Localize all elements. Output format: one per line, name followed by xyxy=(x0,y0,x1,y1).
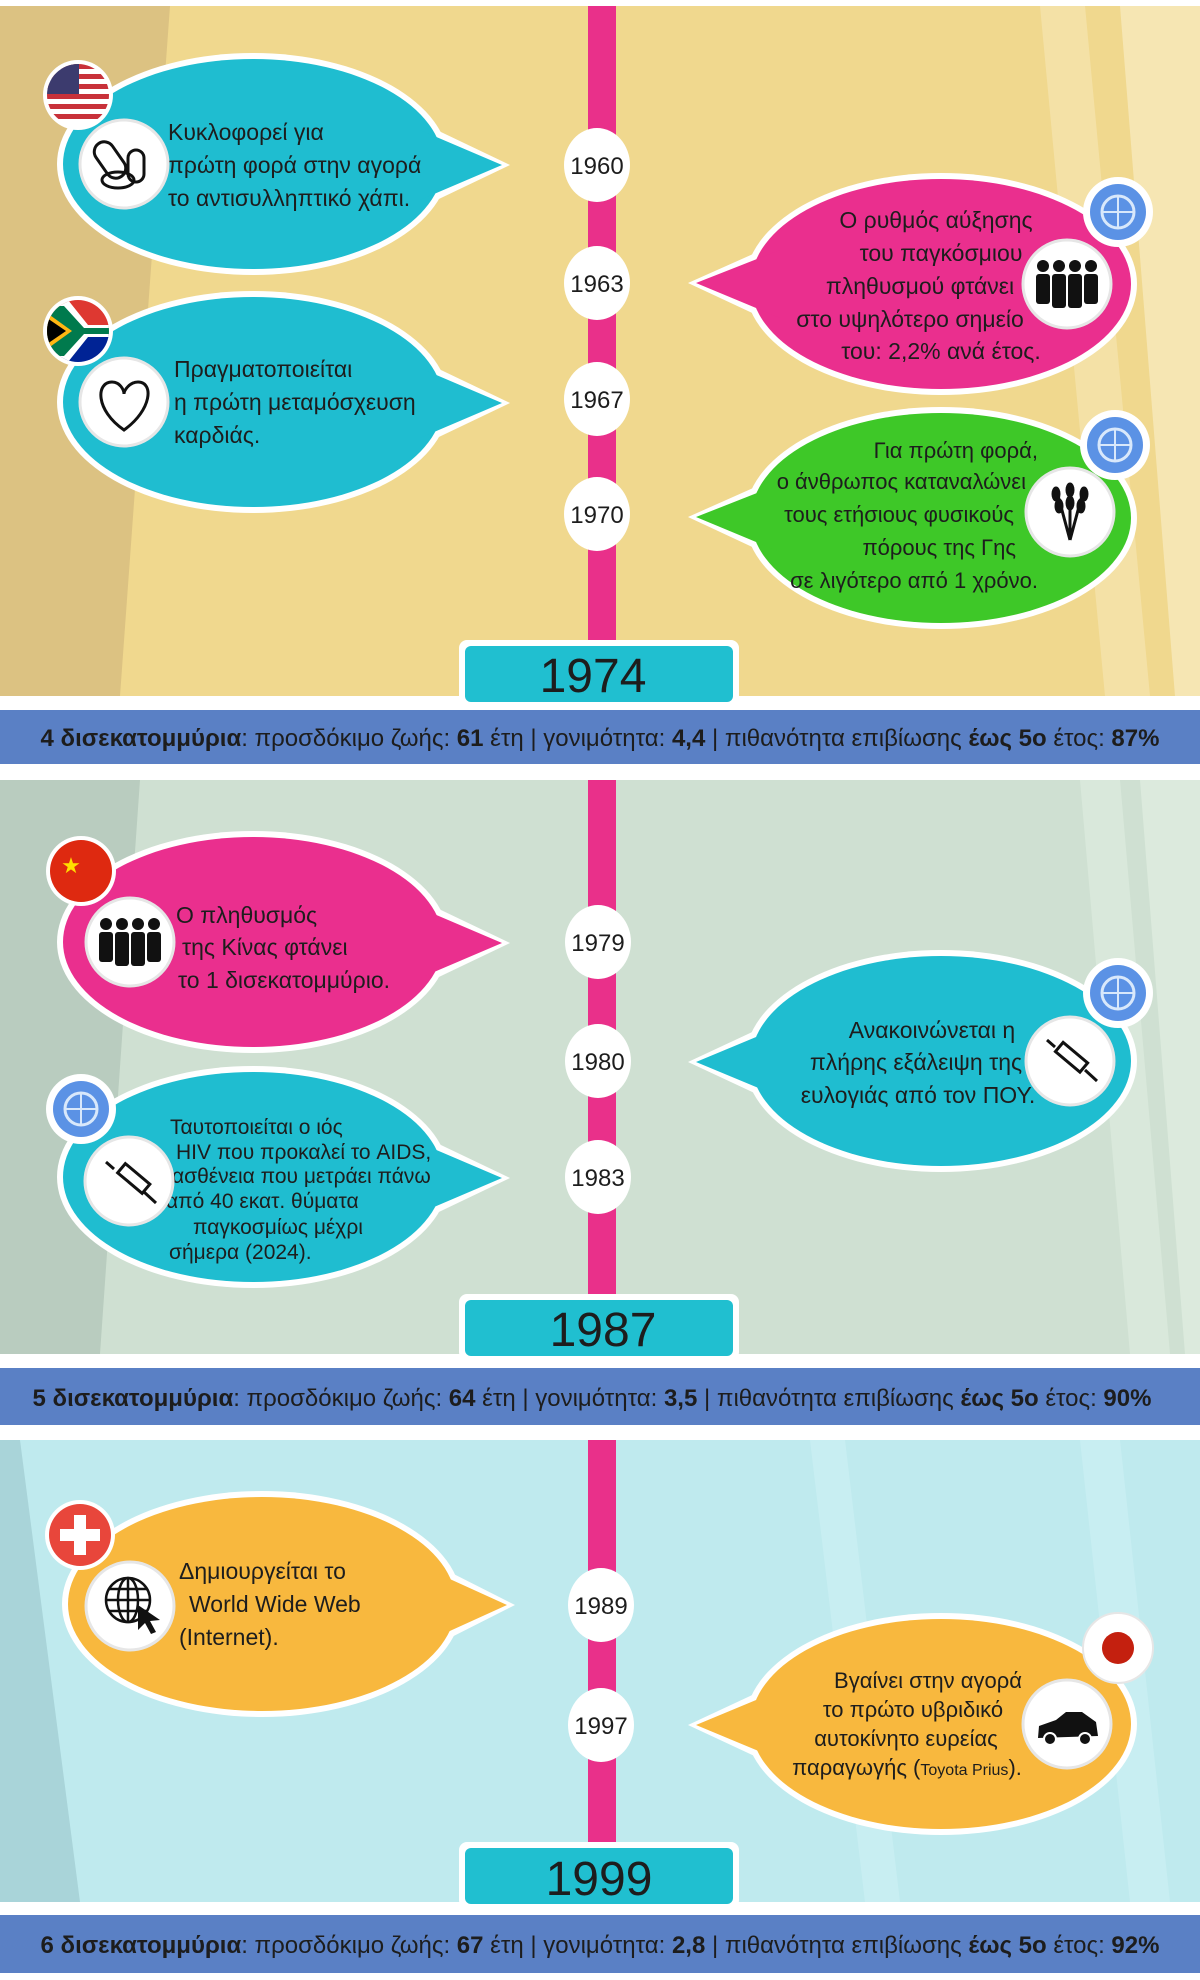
bubble: HIV 1983: παγκοσμίως μέχρι xyxy=(193,1216,363,1239)
icon: syringe smallpox xyxy=(1026,1017,1114,1105)
bubble: China 1979: της Κίνας φτάνει xyxy=(182,934,348,960)
stats band 1974 xyxy=(0,710,1200,764)
bubble: population growth 1963: πληθυσμού φτάνει xyxy=(826,273,1014,299)
bubble: China 1979: Ο πληθυσμός xyxy=(176,902,317,928)
flag: UN 3 xyxy=(46,1074,116,1144)
icon: heart xyxy=(80,358,168,446)
icon: car xyxy=(1023,1680,1111,1768)
bubble: Prius 1997: παραγωγής (Toyota Prius). xyxy=(792,1755,1022,1780)
stats band 1974: 4 δισεκατομμύρια: προσδόκιμο ζωής: 61 έτη | γονιμότητα: 4,4 | πιθανότητα επιβίωσης έως 5ο έτος: 87% xyxy=(41,725,1159,752)
flag: USA xyxy=(43,60,113,130)
year box 1974 xyxy=(459,640,739,706)
bubble: smallpox 1980 xyxy=(688,950,1137,1172)
bubble: China 1979 xyxy=(57,831,510,1053)
stats band 1999: 6 δισεκατομμύρια: προσδόκιμο ζωής: 67 έτη | γονιμότητα: 2,8 | πιθανότητα επιβίωσης έως 5ο έτος: 92% xyxy=(41,1932,1159,1959)
bubble: resources 1970: τους ετήσιους φυσικούς xyxy=(784,502,1014,527)
bubble: WWW 1989: Δημιουργείται το xyxy=(179,1558,346,1584)
year markers section 1: 1963 xyxy=(570,271,624,298)
bubble: Prius 1997: αυτοκίνητο ευρείας xyxy=(814,1726,998,1751)
bubble: pill 1960: το αντισυλληπτικό χάπι. xyxy=(168,185,410,211)
stats band 1999 xyxy=(0,1915,1200,1973)
stats band 1987 xyxy=(0,1368,1200,1425)
bubble: WWW 1989 xyxy=(62,1491,515,1717)
bubble: resources 1970: σε λιγότερο από 1 χρόνο. xyxy=(790,568,1038,593)
year box 1999 xyxy=(459,1842,739,1908)
bubble: population growth 1963: του: 2,2% ανά έτος. xyxy=(841,338,1041,364)
flag: Japan xyxy=(1083,1613,1153,1683)
bubble: WWW 1989: World Wide Web xyxy=(189,1591,361,1617)
icon: globe cursor xyxy=(86,1562,174,1650)
flag: Switzerland xyxy=(45,1500,115,1570)
year markers section 1: 1970 xyxy=(570,502,624,529)
bubble: smallpox 1980: πλήρης εξάλειψη της xyxy=(810,1049,1022,1075)
bubble: pill 1960: πρώτη φορά στην αγορά xyxy=(168,152,421,178)
bubble: resources 1970 xyxy=(688,407,1137,629)
bubble: population growth 1963 xyxy=(688,173,1137,395)
flag: China: ★ xyxy=(61,853,81,878)
bubble: HIV 1983: HIV που προκαλεί το AIDS, xyxy=(176,1141,431,1164)
bubble: heart 1967 xyxy=(57,291,510,513)
year markers section 1: 1960 xyxy=(570,153,624,180)
bubble: pill 1960 xyxy=(57,53,510,275)
bubble: Prius 1997 xyxy=(688,1613,1137,1835)
timeline bar 2 xyxy=(588,780,616,1300)
year markers section 2: 1980 xyxy=(571,1049,625,1076)
flag: South Africa xyxy=(43,296,113,366)
flag: UN 2 xyxy=(1080,410,1150,480)
icon: people China xyxy=(86,898,174,986)
stats band 1987: 5 δισεκατομμύρια: προσδόκιμο ζωής: 64 έτη | γονιμότητα: 3,5 | πιθανότητα επιβίωσης έως 5ο έτος: 90% xyxy=(33,1385,1151,1412)
icon: pills xyxy=(80,120,168,208)
icon: syringe HIV xyxy=(85,1137,173,1225)
bubble: China 1979: το 1 δισεκατομμύριο. xyxy=(178,967,390,993)
bubble: population growth 1963: Ο ρυθμός αύξησης xyxy=(839,207,1033,233)
bubble: heart 1967: καρδιάς. xyxy=(174,422,260,448)
bubble: heart 1967: Πραγματοποιείται xyxy=(174,356,352,382)
year markers section 2: 1979 xyxy=(571,930,625,957)
bubble: WWW 1989: (Internet). xyxy=(179,1624,279,1650)
year box 1987 xyxy=(459,1294,739,1360)
bubble: resources 1970: ο άνθρωπος καταναλώνει xyxy=(777,469,1026,494)
bubble: HIV 1983: Ταυτοποιείται ο ιός xyxy=(170,1116,343,1139)
bubble: HIV 1983: από 40 εκατ. θύματα xyxy=(166,1190,359,1213)
bubble: HIV 1983: ασθένεια που μετράει πάνω xyxy=(172,1165,431,1188)
icon: wheat xyxy=(1026,468,1114,556)
year markers section 2: 1983 xyxy=(571,1165,625,1192)
flag: UN 4 xyxy=(1083,958,1153,1028)
bubble: smallpox 1980: ευλογιάς από τον ΠΟΥ. xyxy=(801,1082,1035,1108)
year markers section 1 xyxy=(564,128,630,551)
bubble: HIV 1983 xyxy=(57,1066,510,1288)
timeline bar 3 xyxy=(588,1440,616,1850)
year markers section 3: 1989 xyxy=(574,1593,628,1620)
panel: section 1960-1974 background xyxy=(0,6,1200,696)
bubble: resources 1970: πόρους της Γης xyxy=(862,535,1016,560)
bubble: smallpox 1980: Ανακοινώνεται η xyxy=(849,1017,1015,1043)
year box 1999: 1999 xyxy=(546,1853,652,1906)
bubble: resources 1970: Για πρώτη φορά, xyxy=(874,438,1038,463)
year box 1974: 1974 xyxy=(540,650,646,703)
icon: people xyxy=(1023,240,1111,328)
year box 1987: 1987 xyxy=(550,1304,656,1357)
flag: UN 1 xyxy=(1083,177,1153,247)
bubble: heart 1967: η πρώτη μεταμόσχευση xyxy=(174,389,416,415)
year markers section 2 xyxy=(565,905,631,1214)
bubble: Prius 1997: το πρώτο υβριδικό xyxy=(823,1697,1003,1722)
bubble: population growth 1963: στο υψηλότερο σημείο xyxy=(796,306,1024,332)
bubble: population growth 1963: του παγκόσμιου xyxy=(860,240,1022,266)
panel: section 1979-1987 background xyxy=(0,780,1200,1354)
timeline bar 1 xyxy=(588,6,616,656)
year markers section 1: 1967 xyxy=(570,387,624,414)
flag: China xyxy=(46,836,116,906)
panel: section 1989-1999 background xyxy=(0,1440,1200,1902)
year markers section 3: 1997 xyxy=(574,1713,628,1740)
bubble: Prius 1997: Βγαίνει στην αγορά xyxy=(834,1668,1022,1693)
bubble: pill 1960: Κυκλοφορεί για xyxy=(168,119,324,145)
year markers section 3 xyxy=(568,1568,634,1762)
bubble: HIV 1983: σήμερα (2024). xyxy=(169,1241,312,1264)
